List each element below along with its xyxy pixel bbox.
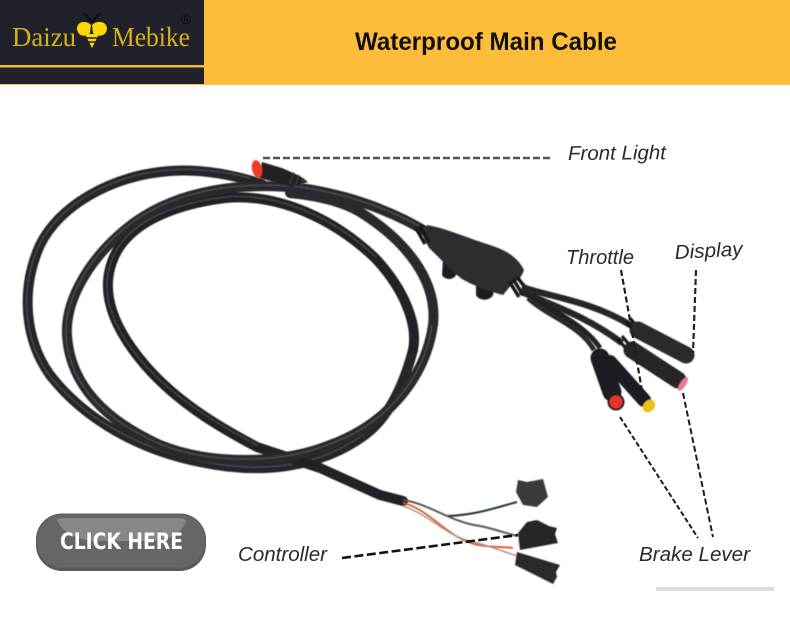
controller wires and plugs bbox=[403, 479, 560, 584]
branch: display bbox=[522, 287, 686, 355]
strain relief rings bbox=[416, 225, 528, 297]
logo: ® bbox=[181, 11, 192, 27]
dashed leader lines bbox=[263, 158, 713, 558]
icon: bee bbox=[77, 13, 107, 48]
main cable coil bbox=[27, 169, 434, 501]
header banner bbox=[0, 0, 790, 85]
splitter body bbox=[424, 225, 524, 295]
logo: Daizu bbox=[12, 22, 76, 52]
leader: throttle bbox=[621, 270, 643, 397]
leader: display bbox=[693, 270, 696, 353]
label: brake lever: Brake Lever bbox=[639, 544, 751, 566]
title: Waterproof Main Cable bbox=[355, 28, 617, 56]
grey bar bbox=[656, 587, 774, 591]
plug: bottom bbox=[515, 552, 560, 584]
button: click here: CLICK HERE bbox=[60, 530, 183, 555]
branch: brake lever left bbox=[528, 298, 624, 410]
leader: front light bbox=[263, 157, 552, 159]
label: controller: Controller bbox=[238, 544, 328, 566]
front light connector bbox=[250, 159, 308, 187]
leader: brake lever left bbox=[620, 417, 698, 538]
mounting tabs bbox=[442, 260, 493, 300]
plug: top bbox=[516, 479, 548, 507]
label: front light: Front Light bbox=[568, 142, 668, 165]
label: display: Display bbox=[674, 238, 744, 264]
button: click here bbox=[36, 514, 206, 571]
labels bbox=[238, 142, 751, 566]
leader: controller bbox=[342, 535, 518, 558]
branch: throttle bbox=[530, 297, 658, 415]
logo: Mebike bbox=[112, 22, 190, 52]
Y splitter bbox=[416, 225, 528, 300]
plug: middle bbox=[518, 520, 558, 550]
leader: brake lever right bbox=[683, 393, 713, 537]
cable: inner coil to controller bbox=[107, 196, 414, 501]
cable: front light loop bbox=[27, 169, 413, 468]
logo bbox=[12, 11, 192, 52]
cable: middle coil from splitter bbox=[66, 185, 434, 460]
branch: brake lever right bbox=[520, 291, 690, 392]
label: throttle: Throttle bbox=[566, 247, 634, 269]
branch cables and connectors bbox=[520, 287, 690, 415]
wires bbox=[403, 500, 517, 556]
